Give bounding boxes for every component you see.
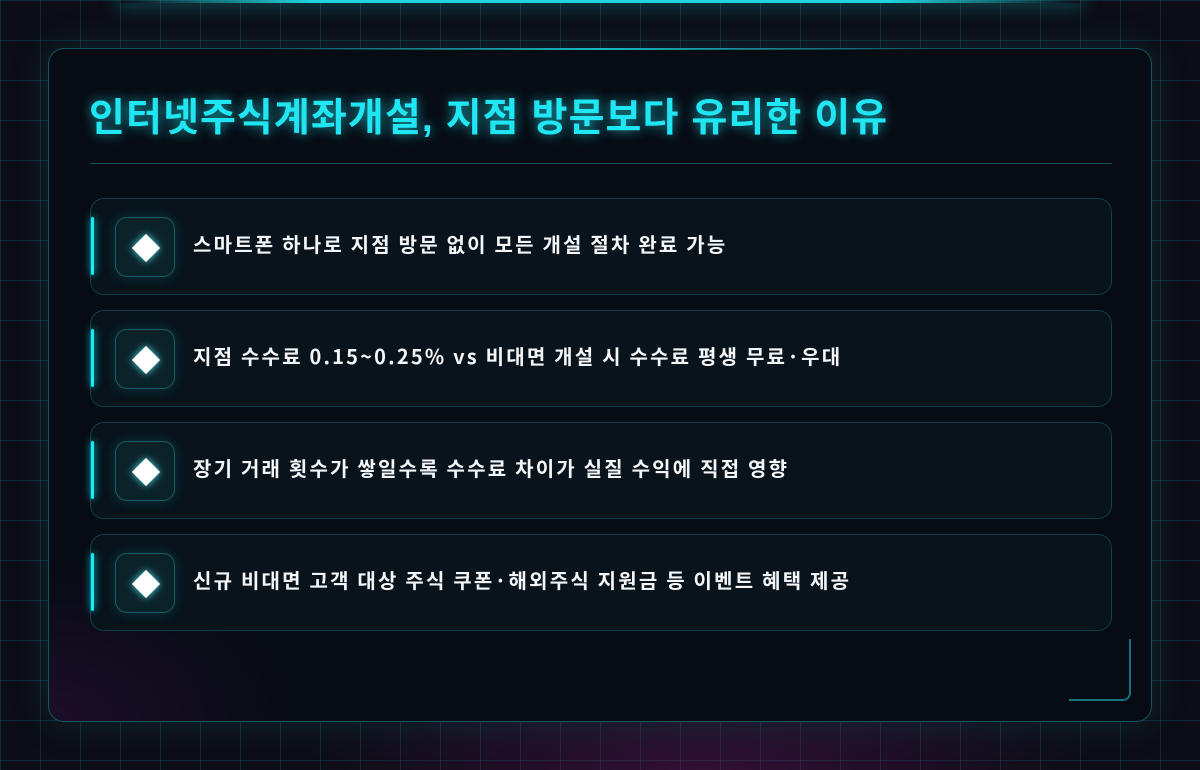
text 2: 지점 수수료 0.15~0.25% vs 비대면 개설 시 수수료 평생 무료·우대	[193, 341, 842, 370]
item 1	[90, 198, 1112, 295]
icon: diamond	[115, 217, 175, 277]
icon: diamond	[115, 329, 175, 389]
item 3	[90, 422, 1112, 519]
icon: diamond	[115, 441, 175, 501]
text 4: 신규 비대면 고객 대상 주식 쿠폰·해외주식 지원금 등 이벤트 혜택 제공	[193, 565, 851, 594]
title: 인터넷주식계좌개설, 지점 방문보다 유리한 이유	[89, 97, 888, 140]
corner bracket	[1069, 639, 1131, 701]
item 4	[90, 534, 1112, 631]
item 2	[90, 310, 1112, 407]
text 1: 스마트폰 하나로 지점 방문 없이 모든 개설 절차 완료 가능	[193, 229, 727, 258]
text 3: 장기 거래 횟수가 쌓일수록 수수료 차이가 실질 수익에 직접 영향	[193, 453, 789, 482]
icon: diamond	[115, 553, 175, 613]
